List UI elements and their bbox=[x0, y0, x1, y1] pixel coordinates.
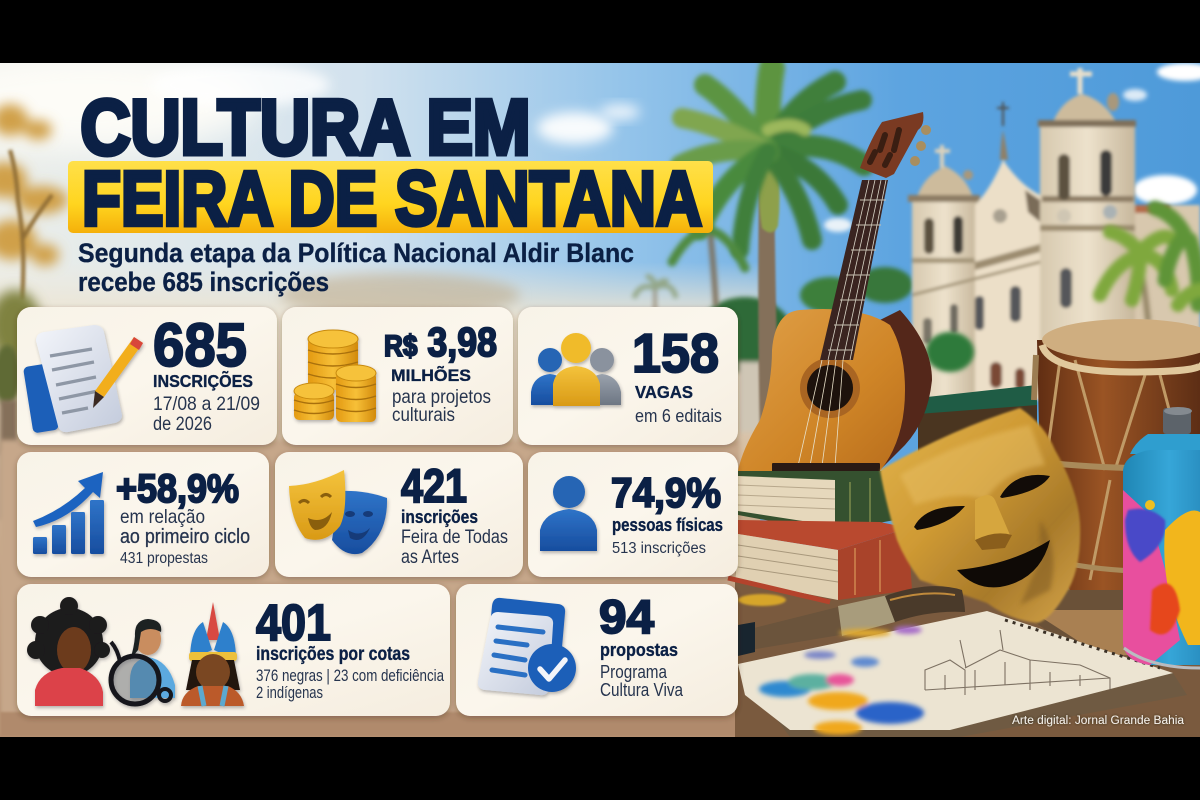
panel: 421 inscrições bbox=[275, 452, 523, 577]
icon: coin stacks bbox=[294, 330, 376, 422]
panel: R$ 3,98 milhões: MILHÕES bbox=[391, 365, 471, 385]
icon: group of people bbox=[531, 333, 621, 406]
panel: 74,9%: pessoas físicas bbox=[612, 515, 723, 535]
sketchbook with church drawing bbox=[738, 611, 1187, 737]
panel: +58,9%: +58,9% bbox=[116, 467, 239, 511]
icon: person bbox=[540, 476, 597, 551]
drum bbox=[1034, 319, 1200, 590]
panel: 421 inscrições: inscrições bbox=[401, 506, 478, 527]
road colour around cards bbox=[0, 440, 740, 737]
panel: R$ 3,98 milhões: R$ 3,98 bbox=[384, 319, 497, 365]
panel: 158 vagas bbox=[518, 307, 738, 445]
title bbox=[68, 83, 713, 242]
central facade bbox=[975, 160, 1040, 400]
title line 1: CULTURA EM bbox=[80, 83, 530, 171]
panel: 94 propostas: propostas bbox=[600, 639, 678, 660]
panel: 94 propostas: 94 bbox=[599, 590, 654, 643]
clouds bbox=[0, 50, 1200, 232]
panel: 74,9%: 513 inscrições bbox=[612, 540, 706, 557]
panel: 74,9% bbox=[528, 452, 738, 577]
panel: +58,9% bbox=[17, 452, 269, 577]
table surface bbox=[735, 560, 1200, 737]
panel: 685 inscrições: 685 bbox=[153, 311, 247, 379]
left tower bbox=[912, 200, 977, 400]
icon: document with check mark bbox=[478, 598, 576, 695]
spray can bbox=[1123, 407, 1200, 668]
subtitle: Segunda etapa da Política Nacional Aldir Blanc bbox=[78, 238, 634, 268]
panel: R$ 3,98 milhões: culturais bbox=[392, 405, 455, 426]
small palm in the distance bbox=[634, 276, 676, 310]
golden theatre mask bbox=[880, 408, 1080, 623]
hazy tree line behind the subtitle bbox=[280, 273, 520, 317]
red book bbox=[738, 520, 908, 550]
panel: 94 propostas: Programa bbox=[600, 662, 668, 682]
church bbox=[908, 68, 1200, 400]
panel: 401 inscrições por cotas: inscrições por cotas bbox=[256, 644, 410, 665]
title line 2: FEIRA DE SANTANA bbox=[82, 156, 702, 242]
panel: +58,9%: 431 propestas bbox=[120, 550, 208, 567]
back green book bbox=[918, 386, 1037, 452]
panel: 74,9%: 74,9% bbox=[611, 469, 721, 516]
panel: 401 inscrições por cotas: 376 negras | 23 com deficiência bbox=[256, 667, 445, 685]
subtitle: recebe 685 inscrições bbox=[78, 267, 329, 297]
panel: 685 inscrições: INSCRIÇÕES bbox=[153, 370, 253, 391]
second palm bbox=[672, 210, 745, 306]
panel: 401 inscrições por cotas bbox=[17, 584, 450, 716]
subtitle bbox=[78, 238, 634, 297]
panel: 94 propostas: Cultura Viva bbox=[600, 680, 684, 700]
yellow highlight band bbox=[68, 161, 713, 233]
icon: three people bbox=[27, 597, 244, 706]
panel: 158 vagas: VAGAS bbox=[635, 382, 693, 402]
panel: +58,9%: ao primeiro ciclo bbox=[120, 526, 250, 548]
panel: 421 inscrições: 421 bbox=[401, 459, 467, 512]
panel: 158 vagas: em 6 editais bbox=[635, 406, 722, 426]
right tower bbox=[1040, 125, 1135, 400]
panel: 421 inscrições: as Artes bbox=[401, 547, 459, 568]
panel: +58,9%: em relação bbox=[120, 506, 205, 528]
bush in front of church bbox=[926, 332, 974, 372]
panel: 158 vagas: 158 bbox=[632, 322, 719, 384]
guitar bbox=[738, 112, 932, 472]
right palms bbox=[1100, 208, 1200, 320]
panel: 685 inscrições bbox=[17, 307, 277, 445]
image credit: Arte digital: Jornal Grande Bahia bbox=[1012, 715, 1185, 727]
sky bbox=[0, 63, 1200, 550]
panel: 401 inscrições por cotas: 401 bbox=[256, 594, 331, 651]
lower windows bbox=[1060, 268, 1072, 308]
paint brush bbox=[738, 586, 965, 656]
panel: 685 inscrições: 17/08 a 21/09 bbox=[153, 393, 260, 415]
icon: document and pencil bbox=[23, 325, 143, 433]
icon: theatre masks bbox=[289, 470, 387, 554]
panel: 421 inscrições: Feira de Todas bbox=[401, 527, 508, 548]
icon: rising bar chart with arrow bbox=[33, 472, 104, 554]
books bbox=[728, 471, 912, 602]
panel: 401 inscrições por cotas: 2 indígenas bbox=[256, 684, 323, 702]
distant hazy ground bbox=[0, 262, 760, 737]
panel: 94 propostas bbox=[456, 584, 738, 716]
panel: R$ 3,98 milhões: para projetos bbox=[392, 387, 491, 408]
background greenery bbox=[697, 267, 913, 432]
green book bbox=[738, 471, 893, 522]
palm tree bbox=[672, 68, 864, 440]
panel: 685 inscrições: de 2026 bbox=[153, 413, 212, 435]
panel: R$ 3,98 milhões bbox=[282, 307, 513, 445]
left trees bbox=[0, 104, 68, 520]
